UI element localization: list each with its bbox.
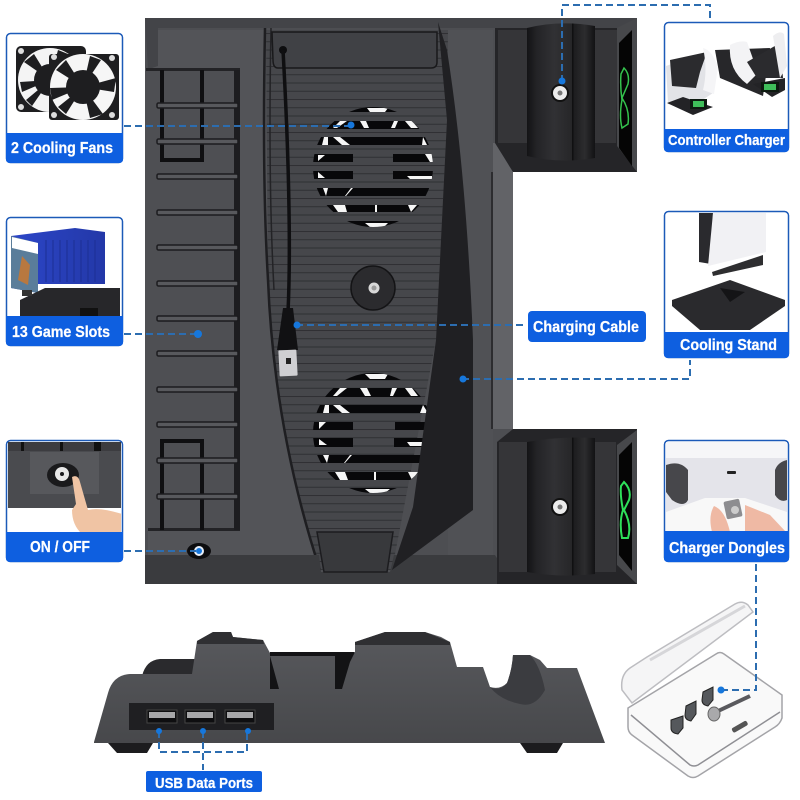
right column (448, 30, 493, 560)
panel: Controller Charger (664, 22, 789, 152)
lower charging dock (497, 429, 637, 584)
panel: Cooling Stand (664, 212, 789, 358)
lower fan grille (313, 373, 427, 493)
label bar (664, 332, 789, 358)
bottom block (148, 530, 240, 580)
panel: ON / OFF (6, 440, 123, 562)
connector dots (156, 78, 724, 734)
panel: 2 Cooling Fans (6, 34, 123, 163)
side body (94, 632, 605, 743)
picture: console on cooling stand (672, 213, 785, 330)
center mount disc (351, 266, 395, 310)
label text: 2 Cooling Fans (11, 140, 113, 157)
label bar (6, 133, 123, 163)
dongle storage box (622, 602, 782, 778)
panel: Charger Dongles (664, 440, 789, 562)
panel: 13 Game Slots (6, 218, 123, 346)
USB port panel (129, 703, 274, 730)
cradle (490, 655, 545, 705)
strap grooves (264, 28, 320, 570)
label bar (6, 532, 123, 562)
icon: two cooling fans (16, 46, 119, 120)
label text: Cooling Stand (680, 337, 777, 354)
slot shelves (157, 103, 238, 499)
top block (146, 30, 240, 70)
power button (187, 543, 211, 559)
top caps (197, 632, 264, 644)
side view of the stand (94, 632, 605, 753)
picture: finger pressing button (8, 442, 122, 534)
slot channels (162, 70, 202, 160)
feet (108, 743, 153, 753)
label text: Charger Dongles (669, 540, 785, 557)
center strap band (240, 30, 320, 572)
label text: Controller Charger (668, 132, 785, 149)
label bar (664, 531, 789, 562)
USB ports (147, 710, 255, 723)
top bevel (145, 18, 637, 70)
connector lines (124, 5, 756, 770)
box lid (622, 602, 753, 703)
top cable hook (272, 32, 437, 68)
stand body silhouette (145, 18, 637, 584)
label bar (6, 316, 123, 346)
bottom tab (317, 532, 393, 572)
picture: game cases on stand (11, 228, 120, 320)
textured black strap (392, 22, 473, 570)
left game-slot column (145, 30, 240, 580)
label: Charging Cable: Charging Cable (533, 319, 639, 336)
upper charging dock (495, 18, 637, 172)
center recess (270, 652, 355, 689)
label: USB Data Ports: USB Data Ports (155, 775, 253, 792)
charging cable and USB plug (277, 46, 298, 376)
main product: vertical stand top view (145, 18, 637, 584)
picture: dongle inserted in controller (666, 442, 787, 533)
vented center area (264, 28, 448, 570)
bottom band (145, 555, 513, 584)
upper fan grille (310, 107, 440, 227)
label text: ON / OFF (30, 539, 90, 556)
rear hump (142, 659, 195, 676)
label bar (664, 129, 789, 152)
label text: 13 Game Slots (12, 324, 110, 341)
dongles (671, 687, 750, 734)
label: Charging Cable (528, 311, 646, 342)
picture: controllers on charger (666, 32, 787, 115)
box base (628, 652, 782, 778)
